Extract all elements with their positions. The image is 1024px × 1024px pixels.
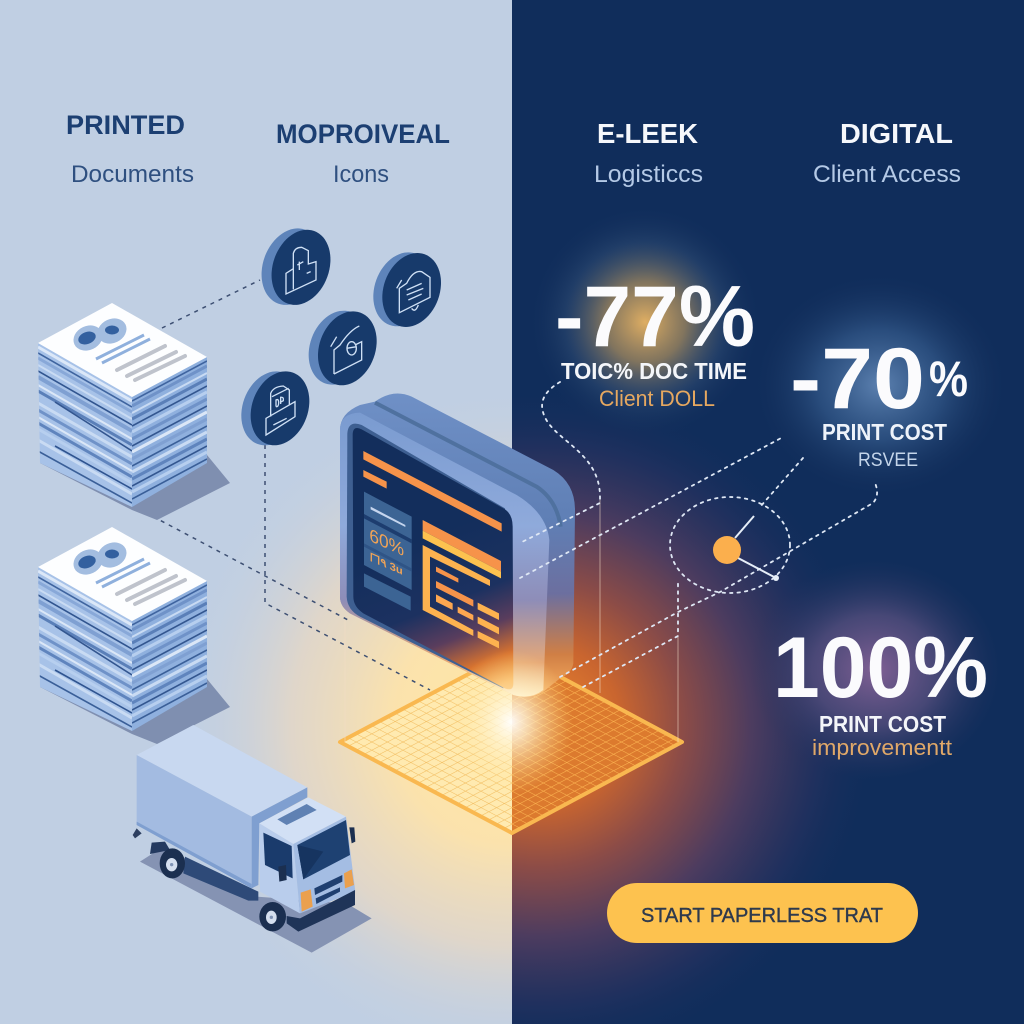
icon: house disc (299, 302, 387, 394)
stat: -77% (555, 269, 755, 411)
icon group: floating discs (231, 220, 451, 454)
column heading: logistics: E-LEEK (597, 118, 698, 149)
call to action button: START PAPERLESS TRAT (641, 904, 883, 927)
stat: -70%: RSVEE (858, 450, 918, 471)
monitor screen (347, 424, 505, 688)
column heading: icons: Icons (333, 161, 389, 188)
stat: 100%: PRINT COST (819, 711, 946, 737)
screen content: layout blocks (423, 520, 501, 648)
warm glow, light side (0, 300, 512, 1024)
column heading: icons: MOPROIVEAL (276, 119, 450, 149)
column heading: digital client access: DIGITAL (840, 118, 953, 149)
column heading: digital client access (813, 118, 961, 188)
screen content: stat panel: 60% (369, 525, 404, 561)
stat: -70%: % (929, 351, 968, 407)
screen content: heading bars (363, 451, 502, 532)
screen content: stat panel: ㄇ٩ 3u (369, 550, 403, 578)
icon: printer disc (231, 363, 319, 454)
column heading: printed documents (66, 110, 194, 188)
screen content: stat panel (364, 492, 412, 611)
light flare (449, 650, 573, 794)
document stack, lower (38, 527, 230, 744)
truck cab (259, 797, 355, 932)
delivery truck (133, 725, 372, 953)
stat: 100%: improvementt (812, 735, 952, 760)
stat: -70%: -70 (790, 331, 925, 427)
column heading: icons (276, 119, 450, 188)
stat: -77%: Client DOLL (599, 386, 715, 411)
left panel background (0, 0, 512, 1024)
stat: 100%: 100% (773, 620, 988, 716)
document stack, upper (38, 303, 230, 520)
white dotted connectors, dark side (520, 382, 877, 687)
column heading: printed documents: PRINTED (66, 110, 185, 140)
stat: 100% (773, 620, 988, 760)
stat: -70%: PRINT COST (822, 419, 947, 445)
stat: -77%: TOIC% DOC TIME (561, 358, 747, 384)
icon: bell disc (363, 244, 451, 335)
stat: -70% (790, 331, 968, 471)
truck wheels (160, 848, 286, 931)
icon: document case disc (251, 220, 341, 313)
truck cargo box (137, 725, 307, 888)
warm glow, dark side (512, 300, 1024, 1024)
monitor bezel (340, 413, 549, 697)
thin vertical guides (345, 497, 678, 742)
dark dashed connectors, light side (137, 280, 430, 690)
monitor body (340, 393, 575, 697)
call to action button (607, 883, 918, 943)
column heading: digital client access: Client Access (813, 161, 961, 188)
timeline node (713, 516, 779, 581)
truck chassis (133, 828, 258, 901)
column heading: logistics: Logisticcs (594, 161, 703, 188)
stat: -77%: -77% (555, 269, 755, 365)
column heading: logistics (594, 118, 703, 188)
column heading: printed documents: Documents (71, 161, 194, 188)
right panel background (512, 0, 1024, 1024)
truck shadow (140, 847, 372, 953)
grid platform (340, 651, 682, 833)
monitor (340, 393, 575, 697)
